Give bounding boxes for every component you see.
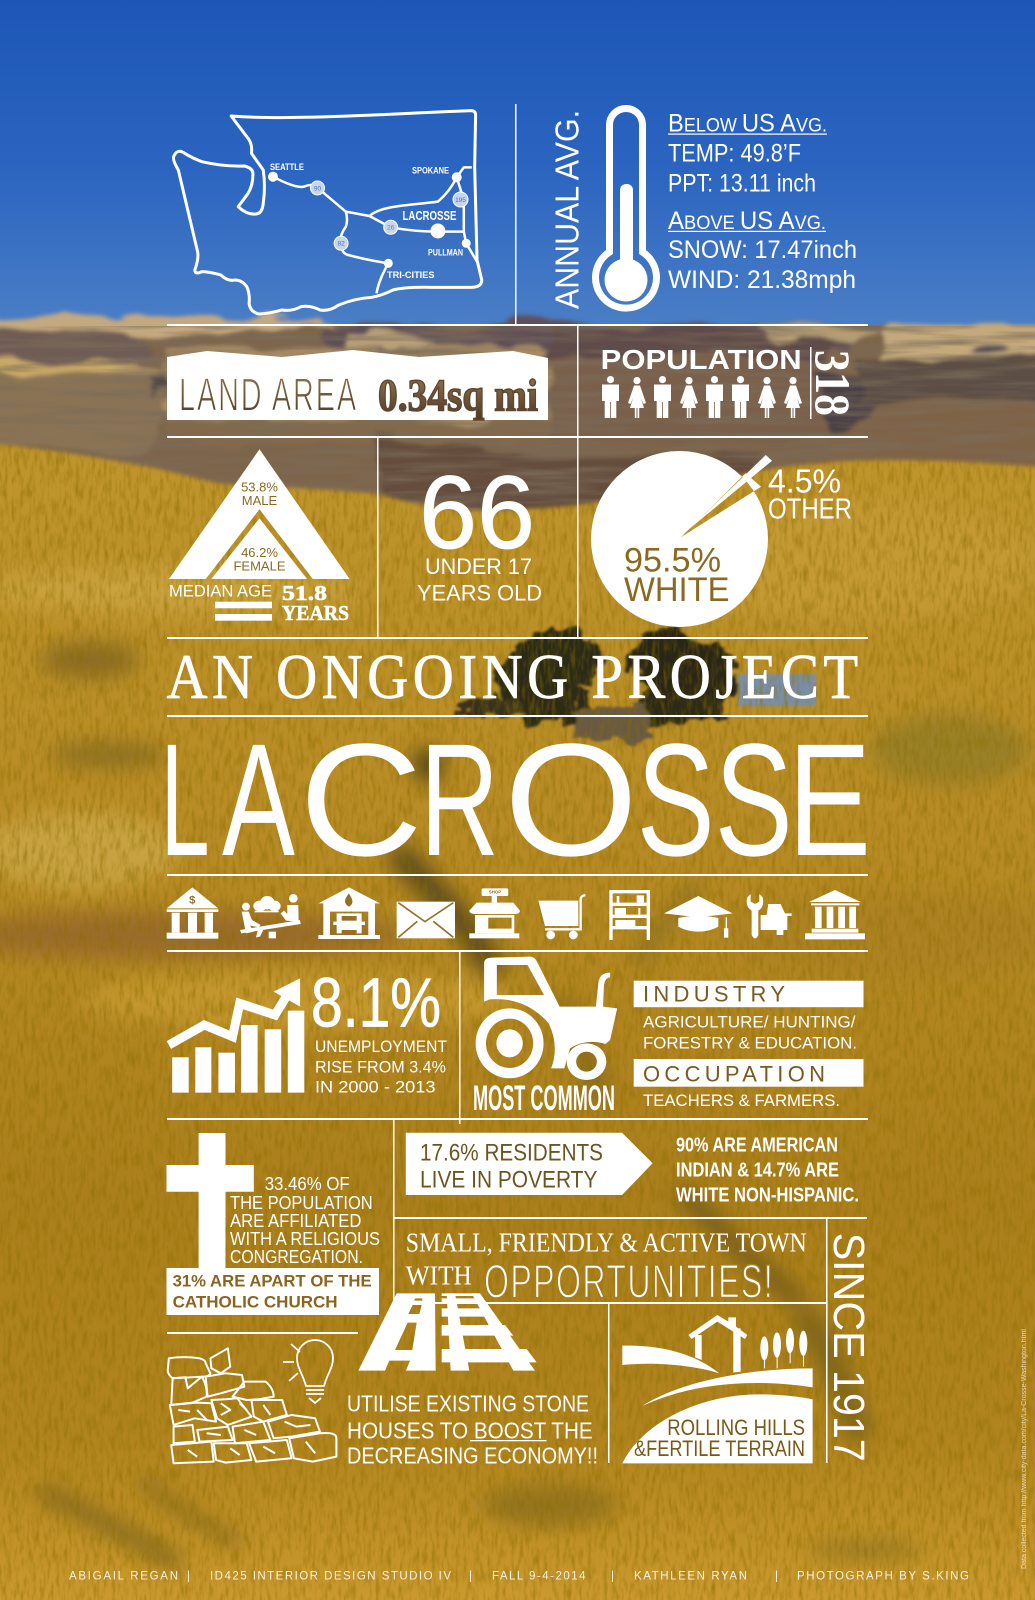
pie [591, 451, 768, 627]
snow: SNOW: 17.47inch [668, 236, 857, 264]
panel: under 17 [417, 455, 542, 606]
icon: light bulb [283, 1340, 333, 1403]
title: LaCrosse: O [504, 710, 638, 889]
highway numbers: 90 [314, 186, 321, 192]
panel: religion [166, 1133, 380, 1315]
icon row: commerce and education [538, 890, 865, 940]
unemployment caption: UNEMPLOYMENT [315, 1037, 447, 1056]
under 17 label: UNDER 17 [425, 554, 532, 579]
icon: cross [166, 1133, 254, 1270]
footer credits: ID425 INTERIOR DESIGN STUDIO IV [210, 1570, 451, 1582]
occupation detail: TEACHERS & FARMERS. [643, 1091, 840, 1110]
highway numbers: 82 [337, 241, 345, 248]
icon: tractor [476, 957, 617, 1080]
map city labels: LACROSSE [402, 208, 457, 223]
religion statistics: ARE AFFILIATED [230, 1211, 361, 1231]
ethnicity text: 90% ARE AMERICAN [676, 1135, 838, 1157]
title: LaCrosse: C [300, 710, 422, 889]
panel: stone houses idea: DECREASING ECONOMY!! [347, 1442, 598, 1468]
panel: rolling hills [622, 1315, 813, 1463]
map city labels: SPOKANE [412, 166, 449, 176]
footer credits: PHOTOGRAPH BY S.KING [797, 1570, 969, 1582]
panel: religion: 31% ARE APART OF THE [173, 1272, 372, 1291]
panel: most common industry [473, 957, 864, 1118]
population value: 318 [805, 350, 861, 416]
below US average heading: BELOW US AVG. [668, 110, 827, 138]
footer credits: | [469, 1570, 472, 1582]
icon: wrench and car [747, 894, 792, 938]
map city labels: SEATTLE [270, 162, 304, 172]
median age value: 51.8 [282, 581, 327, 605]
unemployment rate: 8.1% [311, 964, 441, 1042]
map outline and roads [173, 111, 482, 314]
map city labels: TRI-CITIES [387, 270, 434, 280]
map markers [268, 172, 471, 268]
male share: 53.8% [241, 480, 278, 495]
icon: graduation cap [664, 896, 733, 938]
title: LaCrosse: S [715, 710, 793, 889]
panel: population [601, 344, 861, 419]
title: LaCrosse: L [161, 710, 210, 889]
median age label: MEDIAN AGE [169, 582, 272, 601]
panel: climate statistics [668, 110, 857, 294]
other label: OTHER [768, 494, 852, 526]
panel: stone houses idea: HOUSES TO BOOST THE [347, 1417, 593, 1443]
title: LaCrosse: S [637, 710, 715, 889]
icon: shop: SHOP [489, 890, 501, 895]
data source note: Data collected from http://www.city-data.com/city/La-Crosse-Washington.html [1021, 1329, 1028, 1569]
highway numbers: 195 [455, 197, 466, 204]
panel: land area [167, 350, 548, 421]
idea text: UTILISE EXISTING STONE [347, 1391, 589, 1417]
icon: fire station [318, 887, 380, 939]
panel: town slogan: OPPORTUNITIES! [484, 1254, 774, 1307]
footer credits [69, 1570, 969, 1582]
panel: unemployment: RISE FROM 3.4% [315, 1058, 446, 1077]
industry detail: AGRICULTURE/ HUNTING/ [643, 1013, 856, 1032]
panel: town slogan: SMALL, FRIENDLY & ACTIVE TOWN [406, 1228, 807, 1258]
most common label: MOST COMMON [473, 1079, 615, 1118]
icon: railway track [358, 1293, 537, 1371]
title: LaCrosse: R [420, 710, 499, 889]
icon row: community services [167, 887, 520, 939]
panel: poverty [406, 1133, 859, 1207]
panel: gender and median age [169, 449, 350, 625]
icon: bank [167, 887, 218, 939]
footer credits: | [775, 1570, 778, 1582]
panel: Washington state map [173, 111, 482, 314]
bar chart with rising arrow [169, 978, 304, 1093]
highway numbers [314, 186, 466, 248]
icon: hills, house and wheat [622, 1315, 813, 1463]
panel: rolling hills: &FERTILE TERRAIN [634, 1436, 805, 1461]
panel: religion: CATHOLIC CHURCH [173, 1292, 338, 1311]
female share: 46.2% [241, 545, 278, 560]
footer credits: FALL 9-4-2014 [492, 1570, 586, 1582]
catholic church callout [166, 1268, 379, 1315]
occupation tag [634, 1059, 864, 1087]
temperature: TEMP: 49.8’F [668, 140, 801, 168]
panel: poverty: INDIAN & 14.7% ARE [676, 1160, 839, 1182]
panel: town slogan: WITH [406, 1260, 472, 1290]
icon: seesaw and tree [240, 894, 301, 938]
icon: thermometer [596, 109, 656, 308]
industry tag [634, 981, 864, 1007]
panel: town slogan [406, 1228, 807, 1307]
panel: unemployment [169, 964, 447, 1097]
years old label: YEARS OLD [417, 581, 542, 606]
land area value: 0.34sq mi [378, 370, 538, 421]
icon: bank: $ [189, 894, 196, 906]
icon: envelope [397, 902, 455, 938]
panel: unemployment: IN 2000 - 2013 [315, 1078, 436, 1097]
religion statistics: 33.46% OF [265, 1174, 350, 1194]
religion statistics: THE POPULATION [230, 1193, 373, 1213]
white label: WHITE [624, 571, 730, 609]
panel: most common industry: OCCUPATION [643, 1062, 825, 1087]
title: LaCrosse: E [788, 710, 871, 889]
icon: shop [469, 888, 520, 938]
equals bars [215, 602, 272, 621]
icon: bookshelf [609, 890, 650, 940]
poverty text: 17.6% RESIDENTS [420, 1140, 603, 1167]
panel: most common industry: INDUSTRY [643, 982, 785, 1007]
footer credits: | [187, 1570, 190, 1582]
icon: civic building [805, 890, 865, 939]
rolling hills text: ROLLING HILLS [667, 1415, 805, 1440]
religion statistics [230, 1174, 380, 1267]
heading: an ongoing project: AN ONGOING PROJECT [166, 641, 862, 712]
map city labels [270, 162, 463, 280]
icon: gender triangle [169, 449, 350, 579]
footer credits: ABIGAIL REGAN [69, 1570, 178, 1582]
other share: 4.5% [768, 463, 841, 500]
panel: poverty: LIVE IN POVERTY [420, 1166, 597, 1193]
religion statistics: WITH A RELIGIOUS [230, 1229, 380, 1249]
panel: stone houses idea [168, 1340, 598, 1468]
pictogram row of residents [602, 376, 802, 418]
panel: most common industry: FORESTRY & EDUCATION. [643, 1033, 857, 1052]
vertical label: since 1917: SINCE 1917 [824, 1233, 873, 1462]
highway shields [310, 181, 468, 250]
male label: MALE [242, 493, 278, 508]
female label: FEMALE [233, 559, 286, 574]
title: LaCrosse: A [222, 710, 295, 889]
footer credits: | [611, 1570, 614, 1582]
highway numbers: 26 [387, 225, 395, 232]
precipitation: PPT: 13.11 inch [668, 170, 816, 198]
panel: poverty: WHITE NON-HISPANIC. [676, 1185, 859, 1207]
map city labels: PULLMAN [428, 248, 463, 258]
arrow callout [406, 1133, 653, 1195]
panel: race pie chart [591, 451, 852, 627]
grid divider lines [167, 104, 868, 1463]
icon: shopping cart [538, 895, 585, 939]
wind: WIND: 21.38mph [668, 266, 856, 294]
icon: stone wall [168, 1348, 336, 1463]
land area label: LAND AREA [179, 369, 358, 421]
above US average heading: ABOVE US AVG. [668, 207, 826, 235]
population heading: POPULATION [601, 344, 802, 375]
footer credits: KATHLEEN RYAN [634, 1570, 747, 1582]
religion statistics: CONGREGATION. [230, 1247, 363, 1267]
big number: 66 [419, 455, 535, 571]
heading: annual avg: ANNUAL AVG. [548, 110, 586, 309]
median age unit: YEARS [282, 601, 349, 625]
white share: 95.5% [624, 542, 721, 580]
pie slice [688, 455, 772, 530]
